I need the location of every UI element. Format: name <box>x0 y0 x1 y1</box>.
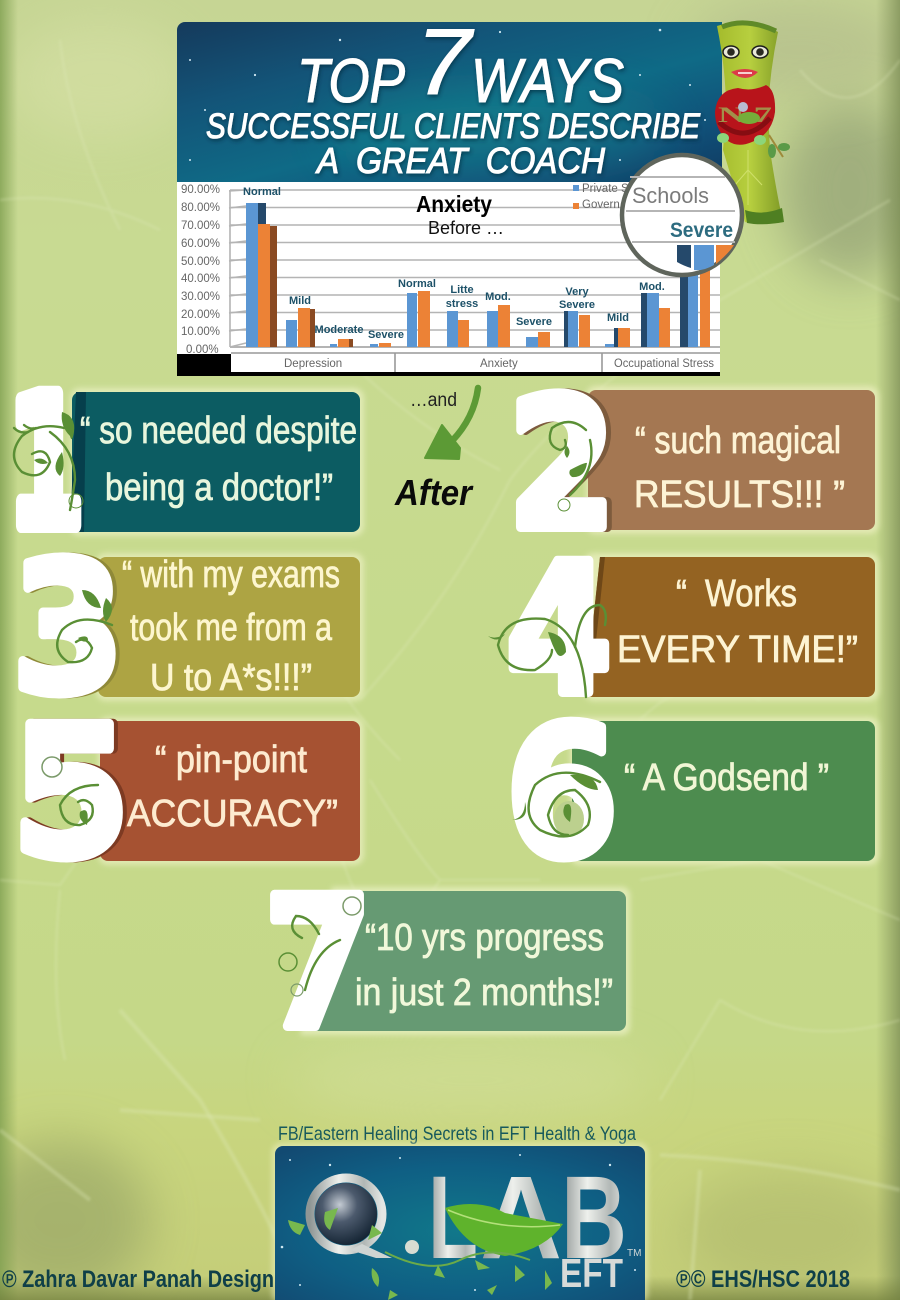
quote 2 <box>634 420 845 516</box>
numeral 5: 5 <box>16 689 134 898</box>
quote 1: “ so needed despite <box>80 410 357 452</box>
y axis labels: 30.00% <box>181 291 220 303</box>
heading: title: WAYS <box>471 47 624 116</box>
logo letters: L <box>428 1152 478 1284</box>
bar labels: Mild <box>289 295 311 307</box>
bars <box>246 203 710 347</box>
text: facebook page: FB/Eastern Healing Secrets in EFT Health & Yoga <box>278 1124 636 1145</box>
card 7 <box>264 860 630 1069</box>
numeral 4: 4 <box>506 526 612 735</box>
numeral 5: 5 <box>12 689 130 898</box>
mascot: leaf scroll character <box>715 22 790 224</box>
card 5 <box>12 689 364 898</box>
mascot: red apple badge: N 7 <box>718 102 772 127</box>
card 1 <box>8 359 364 568</box>
y axis labels: 10.00% <box>181 326 220 338</box>
chart: before anxiety bars <box>177 182 720 376</box>
quote 3: U to A*s!!!” <box>150 657 312 699</box>
vine 6 <box>512 773 600 836</box>
vine 1 <box>14 412 83 510</box>
card 4 <box>488 526 879 735</box>
logo leaf and vine <box>288 1204 563 1300</box>
heading: title: SUCCESSFUL CLIENTS DESCRIBE <box>206 107 701 146</box>
mascot: red apple badge <box>715 85 790 158</box>
bar labels <box>243 186 665 341</box>
connector: and: …and <box>410 390 457 411</box>
arrow: curved green <box>425 388 478 459</box>
logo: Q LAB EFT <box>272 1143 648 1300</box>
bar labels: Severe <box>368 329 404 341</box>
bar labels: Normal <box>243 186 281 198</box>
quote 3: “ with my exams <box>122 554 340 596</box>
quote 2: RESULTS!!! ” <box>634 474 845 516</box>
chart heading: anxiety before: Anxiety <box>416 191 492 217</box>
chart legend: Govern <box>582 199 620 211</box>
bar labels: stress <box>446 298 478 310</box>
quote 3 <box>122 554 340 699</box>
logo letters: EFT <box>560 1250 623 1296</box>
bar labels: Moderate <box>315 324 363 336</box>
panel: title banner <box>177 9 722 183</box>
y axis labels: 20.00% <box>181 309 220 321</box>
vine 4 <box>488 605 606 697</box>
quote 3: took me from a <box>130 607 333 649</box>
chart heading: anxiety before: Before … <box>428 218 504 238</box>
text: designer credit: ℗ Zahra Davar Panah Design <box>2 1266 274 1293</box>
bar labels: Litte <box>450 284 474 296</box>
numeral 3: 3 <box>12 525 124 734</box>
bar labels: Mild <box>607 312 629 324</box>
card 2 <box>508 361 879 570</box>
vine 2 <box>550 422 591 511</box>
card 3 <box>12 525 364 734</box>
card 6 <box>506 689 879 898</box>
quote 6: “ A Godsend ” <box>624 757 829 799</box>
chart legend: Private S <box>582 183 629 195</box>
y axis labels: 70.00% <box>181 220 220 232</box>
quote 5: “ pin-point <box>155 739 307 781</box>
quote 7: “10 yrs progress <box>365 917 604 959</box>
vine 3 <box>57 590 112 662</box>
numeral 3: 3 <box>16 525 128 734</box>
bar labels: Severe <box>559 299 595 311</box>
magnifier: Schools <box>632 183 709 208</box>
bar labels: Mod. <box>485 291 511 303</box>
x axis categories: Depression <box>284 358 342 370</box>
quote 5 <box>127 739 338 835</box>
vine 5 <box>42 757 98 825</box>
quote 7 <box>355 917 613 1014</box>
heading: title <box>206 9 701 181</box>
quote 4 <box>617 573 858 671</box>
logo letters <box>310 1152 641 1296</box>
heading: title: TOP <box>297 47 405 116</box>
numeral 6: 6 <box>506 689 618 898</box>
y axis labels: 40.00% <box>181 273 220 285</box>
chart heading: anxiety before <box>416 191 504 238</box>
x axis categories: Anxiety <box>480 358 518 370</box>
y axis labels: 80.00% <box>181 202 220 214</box>
text: copyright: ℗© EHS/HSC 2018 <box>676 1266 850 1293</box>
bar labels: Very <box>565 286 590 298</box>
quote 5: ACCURACY” <box>127 793 338 835</box>
quote 4: EVERY TIME!” <box>617 629 858 671</box>
quote 4: “ Works <box>676 573 797 615</box>
logo letters: TM <box>627 1248 641 1259</box>
y axis labels: 0.00% <box>186 344 219 356</box>
numeral 1: 1 <box>8 359 84 568</box>
y axis labels: 90.00% <box>181 184 220 196</box>
text: after: After <box>394 472 474 513</box>
heading: title: 7 <box>416 9 475 114</box>
quote 7: in just 2 months!” <box>355 972 613 1014</box>
magnifier <box>622 155 742 275</box>
quote 1 <box>80 410 357 509</box>
chart legend <box>573 183 629 211</box>
mascot face <box>723 46 768 78</box>
logo letters: A <box>480 1152 562 1284</box>
vine 7 <box>279 897 361 996</box>
magnifier: Severe <box>670 219 733 242</box>
bar labels: Mod. <box>639 281 665 293</box>
y axis labels: 50.00% <box>181 256 220 268</box>
y axis labels: 60.00% <box>181 238 220 250</box>
bar labels: Normal <box>398 278 436 290</box>
numeral 7: 7 <box>264 860 372 1069</box>
numeral 2: 2 <box>513 361 621 570</box>
x axis categories: Occupational Stress <box>614 358 714 370</box>
y axis labels <box>181 184 220 356</box>
logo letters: B <box>561 1152 627 1284</box>
quote 1: being a doctor!” <box>105 467 333 509</box>
x axis categories <box>284 358 714 370</box>
heading: title: A GREAT COACH <box>315 140 606 181</box>
quote 2: “ such magical <box>635 420 841 462</box>
bar labels: Severe <box>516 316 552 328</box>
numeral 2: 2 <box>508 361 616 570</box>
